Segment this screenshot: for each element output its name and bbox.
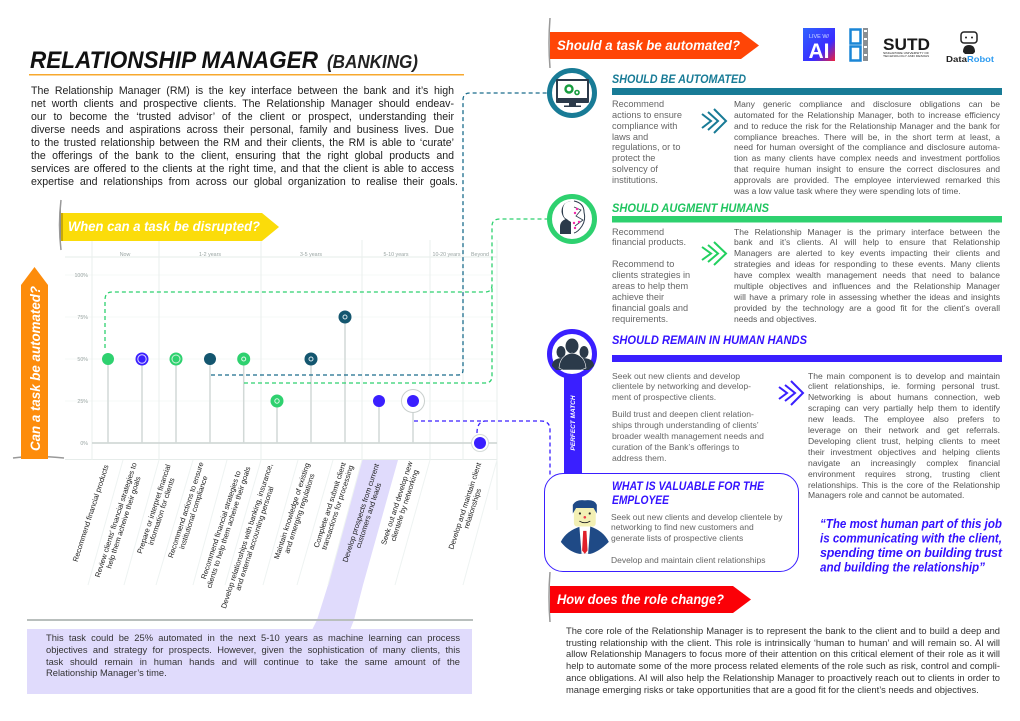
text: automated tasks: actions to ensure [612, 110, 682, 120]
icon: purple chevrons [778, 380, 804, 406]
text: human hands explanation: their investment objectives and helping clients [808, 447, 1000, 457]
logo: live w/ AI: LIVE W/ [809, 34, 830, 40]
task labels: clients to help them acheive their goals [204, 465, 252, 589]
text: human hands tasks: curation of the Bank’s offerings to [612, 442, 739, 452]
task labels: Recommend financial strategies to [199, 470, 243, 580]
task labels: relationships [462, 487, 483, 530]
text: how the role changes: allow Relationship Managers to focus more of their attention on this critical element of their role as it will [566, 649, 1000, 659]
text: human hands explanation: client relationships, ie. forming personal trust. [808, 381, 1000, 391]
task labels: Recommend financial products [71, 463, 111, 563]
task labels: help them acheive their goals [104, 475, 143, 570]
quote: is communicating with the client, [820, 532, 1002, 546]
axis labels: 75% [77, 315, 88, 321]
quote: and building the relationship” [820, 560, 986, 574]
intro text: services are offered to the clients at the right time, and that the client is able to access [31, 163, 454, 175]
text: augment tasks: Recommend to [612, 259, 674, 269]
text: human hands tasks: ships through understanding of clients’ [612, 420, 759, 430]
heading: can a task be automated: Can a task be automated? [27, 286, 43, 451]
text: how the role changes: ance obligations. AI will also help the Relationship Manager to proactively reach out to clients in order to [566, 673, 1000, 683]
callout: selected task note: objectives and strategy for prospects. However, given the sophistication of many clients, this [46, 645, 460, 655]
text: automated tasks: regulations, or to [612, 142, 680, 152]
section heading: should remain in human hands: SHOULD REMAIN IN HUMAN HANDS [612, 333, 807, 347]
task labels: transactions for processing [319, 464, 355, 551]
text: human hands tasks: clientele by networking and develop- [612, 381, 751, 391]
logo: live w/ AI: AI [808, 40, 830, 63]
text: human hands explanation: Networking is about humans connection, web [808, 392, 1000, 402]
task labels: customers and leads [354, 481, 383, 549]
intro text: to the trusted relationship between the RM and their clients, the RM is able to ‘curate’ [31, 137, 454, 149]
heading: valuable: WHAT IS VALUABLE FOR THE [612, 479, 765, 493]
chart grid [65, 240, 497, 585]
text: automated explanation: need for human oversight of the compliance and disclosure automa- [734, 142, 1000, 152]
heading: valuable: EMPLOYEE [612, 493, 670, 507]
text: automated tasks: protect the [612, 153, 655, 163]
axis labels: 10-20 years [433, 252, 461, 258]
panel: what is valuable for the employee [544, 473, 799, 572]
quote: spending time on building trust [820, 546, 1003, 560]
text: how the role changes: help to automate some of the more process related elements of the role such as risk, control and compli- [566, 661, 1000, 671]
task labels: and external accounting personal [233, 485, 276, 592]
section heading: should be automated: SHOULD BE AUTOMATED [612, 72, 746, 86]
task labels: Seek out and develop new [379, 460, 415, 546]
task labels: and emerging regulations [282, 472, 317, 555]
text: augment tasks: financial products. [612, 237, 686, 247]
intro text: our to become the ‘trusted advisor’ of the client or prospect, understanding their [31, 111, 454, 123]
text: human hands tasks: Build trust and deepen client relation- [612, 409, 754, 419]
heading: can a task be automated [13, 267, 64, 459]
logo: SUTD: TECHNOLOGY AND DESIGN [883, 54, 929, 58]
heading: when can a task be disrupted: When can a task be disrupted? [68, 218, 260, 234]
text: human hands explanation: Developing client trust, helping clients to meet [808, 436, 1000, 446]
text: automated explanation: automated for the Relationship Manager, both to increase efficiency [734, 110, 1000, 120]
callout: selected task note: This task could be 25% automated in the next 5-10 years as machine learning can process [46, 633, 460, 643]
text: augment explanation [734, 226, 1000, 324]
task labels: Recommend actions to ensure [166, 461, 206, 559]
text: augment tasks: clients strategies in [612, 270, 690, 280]
task labels: information for clients [146, 476, 177, 546]
text: augment tasks: Recommend [612, 226, 664, 236]
callout: selected task note: Relationship Manager’s time. [46, 668, 167, 678]
axis labels: Now [120, 252, 130, 258]
logo: SUTD: SINGAPORE UNIVERSITY OF [883, 51, 930, 55]
data points [102, 310, 488, 452]
title: (BANKING) [327, 52, 418, 72]
section heading: should remain in human hands [612, 333, 1002, 362]
text: augment explanation: have complex wealth management needs that need to balance [734, 270, 1000, 280]
icon: teal chevrons [701, 108, 728, 134]
section heading: should augment humans [612, 201, 1002, 222]
intro text: the offerings of the bank to the client, ensuring that the right global products and [31, 150, 454, 162]
icon: people with perfect match stem: PERFECT MATCH [570, 395, 577, 451]
text: automated explanation: approvals are provided. The employee interviewed remarked this [734, 175, 1000, 185]
text: augment explanation: Managers are alerted to key events impacting their clients and [734, 248, 1000, 258]
text: augment explanation: The Relationship Manager is the primary interface between the [734, 226, 1000, 236]
title [29, 47, 464, 76]
text: human hands explanation [808, 370, 1000, 500]
axis labels [74, 252, 489, 447]
text: human hands tasks: address them. [612, 453, 666, 463]
text: automated explanation: was a low value task where they were spending lots of time. [734, 186, 961, 196]
text: human hands explanation: relationships. This is the core of the Relationship [808, 480, 1000, 490]
intro text: The Relationship Manager (RM) is the key interface between the bank and it’s high [31, 85, 454, 97]
stems and baseline [92, 317, 497, 443]
text: augment explanation: strategies and ideas for responding to these events. Many clients [734, 259, 1000, 269]
text: human hands explanation: new leads. The employee also prefers to [808, 414, 1000, 424]
rule under chart [27, 619, 473, 620]
icon: brain and human head [547, 194, 597, 244]
task labels: Develop relationships with banking, insurance, [219, 462, 275, 610]
task labels: Develop prospects from current [341, 463, 381, 563]
icon: people with perfect match stem [547, 329, 597, 473]
section heading: should be automated [612, 72, 1002, 95]
text: augment explanation: will have a primary role in assessing whether the ideas and insights [734, 292, 1000, 302]
text: human hands tasks: ment of prospective clients. [612, 392, 716, 402]
task labels: clientele by networking [389, 469, 420, 542]
text: human hands explanation: navigate an increasingly complex financial [808, 458, 1000, 468]
text: human hands tasks [612, 370, 764, 463]
icon: monitor with gears [547, 68, 597, 118]
task labels: Prepare or interpret financial [135, 463, 173, 555]
text: valuable list: Develop and maintain client relationships [611, 555, 766, 565]
logo: DataRobot: Robot [967, 54, 994, 64]
text: automated tasks: institutions. [612, 175, 658, 185]
heading: should a task be automated [548, 18, 759, 68]
text: human hands explanation: The main component is to develop and maintain [808, 370, 1000, 380]
text: augment tasks: requirements. [612, 314, 668, 324]
text: valuable list: Seek out new clients and develop clientele by [611, 512, 783, 522]
text: augment explanation: multiple objectives and influences and the Relationship Manager [734, 281, 1000, 291]
text: how the role changes: trusting relationship with the client. This role is intrinsically ‘human to human’ and will remain so. AI will [566, 638, 1000, 648]
text: automated tasks: Recommend [612, 99, 664, 109]
text: human hands explanation: scraping can very partially help them to identify [808, 403, 1000, 413]
text: automated tasks: laws and [612, 132, 648, 142]
text: how the role changes: The core role of the Relationship Manager is to represent the bank to the client and to build a deep and [566, 626, 1000, 636]
heading: valuable [612, 479, 765, 507]
text: automated tasks [612, 99, 682, 185]
axis labels: 5-10 years [383, 252, 409, 258]
title: RELATIONSHIP MANAGER [30, 47, 318, 74]
task labels: Complete and submit client [312, 461, 348, 549]
axis labels: Beyond [471, 252, 489, 258]
logo: DataRobot: Data [946, 54, 967, 64]
text: valuable list: networking to find new customers and [611, 522, 754, 532]
quote: “The most human part of this job [820, 517, 1002, 531]
callout: selected task note [27, 629, 472, 694]
text: automated tasks: solvency of [612, 164, 658, 174]
logo: live w/ AI [803, 28, 835, 63]
intro text: diverse needs and aspirations across their personal, family and business lives. Due [31, 124, 454, 136]
text: human hands tasks: Seek out new clients and develop [612, 370, 740, 380]
icon: businessman [560, 500, 609, 554]
text: valuable list [611, 512, 783, 565]
axis labels: 0% [80, 441, 88, 447]
icon: green chevrons [702, 241, 728, 266]
text: automated tasks: compliance with [612, 121, 677, 131]
axis labels: 3-5 years [300, 252, 322, 258]
intro text: expertise and relationships from across our global organization to realise their goals. [31, 176, 458, 188]
logo: blue building mark [849, 28, 868, 62]
text: how the role changes [566, 626, 1000, 695]
axis labels: 50% [77, 357, 88, 363]
text: augment explanation: provided by the technology are a good fit for the client’s overall [734, 303, 1000, 313]
axis labels: 25% [77, 399, 88, 405]
text: human hands explanation: leverage on their network and get referrals. [808, 425, 1000, 435]
text: automated explanation: tion as many clients have complex needs and investment portfolios [734, 153, 1000, 163]
text: valuable list: generate lists of prospective clients [611, 533, 743, 543]
text: automated explanation: and to reduce the risk for the Relationship Manager and the bank for [734, 121, 1000, 131]
heading: how does the role change: How does the role change? [557, 591, 724, 607]
logo: SUTD: SUTD [883, 35, 930, 54]
text: human hands explanation: environment requires strong, trusting client [808, 469, 1000, 479]
axis labels: 1-2 years [199, 252, 221, 258]
text: human hands tasks: broader wealth management needs and [612, 431, 764, 441]
text: augment tasks: achieve their [612, 292, 664, 302]
callout: selected task note: task should remain in human hands and will continue to take the same amount of the [46, 657, 460, 667]
highlight band for selected task [312, 460, 398, 630]
heading: should a task be automated: Should a task be automated? [557, 37, 740, 53]
text: automated explanation: that require human insight to ensure the correct disclosures and [734, 164, 1000, 174]
intro text [31, 85, 458, 188]
text: augment explanation: bank and it’s clients. AI will help to ensure that Relationship [734, 237, 1000, 247]
section heading: should augment humans: SHOULD AUGMENT HUMANS [612, 201, 769, 215]
task labels: Develop and maintain client [447, 461, 483, 551]
heading: when can a task be disrupted [58, 200, 279, 250]
text: augment tasks: financial goals and [612, 303, 688, 313]
task labels: Review clients' financial strategies to [93, 461, 139, 579]
task labels: Maintain knowledge of existing [272, 462, 312, 560]
intro text: net worth clients and prospective clients. The Relationship Manager should endeav- [31, 98, 454, 110]
text: augment tasks [612, 226, 690, 324]
text: augment explanation: needs and objectives. [734, 314, 817, 324]
text: how the role changes: manage emerging risks or take opportunities that are a good fit for the client’s needs and objectives. [566, 685, 979, 695]
text: augment tasks: areas to help them [612, 281, 688, 291]
text: automated explanation [734, 99, 1000, 196]
task labels: institutional compliance [177, 475, 210, 550]
text: automated explanation: compliance breaches. There will be, in the short term at least, a [734, 132, 1000, 142]
axis labels: 100% [74, 273, 88, 279]
text: automated explanation: Many generic compliance and disclosure obligations can be [734, 99, 1000, 109]
task labels [71, 460, 491, 612]
text: human hands explanation: Managers role and cannot be automated. [808, 490, 964, 500]
logo: DataRobot [946, 31, 994, 64]
